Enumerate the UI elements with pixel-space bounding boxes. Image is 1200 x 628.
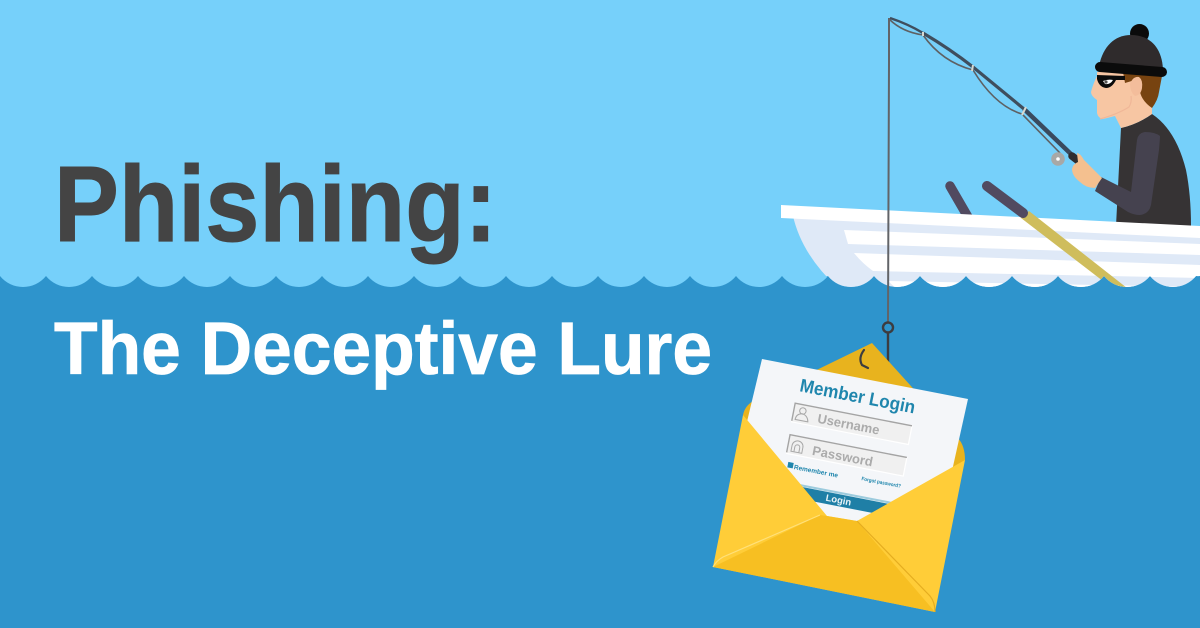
password field <box>786 435 907 476</box>
hair <box>1123 72 1162 108</box>
envelope bottom panel <box>713 515 935 612</box>
rowing boat <box>781 186 1200 292</box>
username icon <box>795 407 810 422</box>
jaw shadow <box>1100 96 1131 119</box>
far oar <box>950 186 972 224</box>
eye <box>1103 80 1113 84</box>
envelope front base <box>713 415 965 612</box>
oar handle <box>987 186 1023 213</box>
reel hub <box>1056 157 1060 161</box>
hand <box>1072 153 1102 188</box>
hook ring <box>883 322 893 332</box>
form heading: Member Login <box>798 374 917 417</box>
rod upper shaft <box>923 33 1024 109</box>
login button label: Login <box>825 493 852 509</box>
username border <box>792 403 912 444</box>
hull <box>793 216 1200 288</box>
mask <box>1097 75 1125 88</box>
remember label: Remember me <box>793 464 839 480</box>
hull stripe 2 <box>854 253 1200 278</box>
password icon <box>791 440 804 453</box>
title: Phishing: Phishing: <box>54 143 497 264</box>
fishing rod <box>889 18 1081 166</box>
forgot password link: Forgot password? <box>861 476 901 490</box>
fisherman <box>1091 24 1191 226</box>
rod tip <box>890 18 923 33</box>
right flap crease <box>857 521 935 612</box>
login form contents <box>767 372 927 519</box>
left flap crease <box>713 515 820 567</box>
fishing line loops <box>889 19 1060 153</box>
hook shank <box>887 333 889 362</box>
login button <box>767 481 906 519</box>
envelope back and flap <box>743 343 965 560</box>
fishing line <box>888 18 889 322</box>
envelope lure <box>713 343 968 612</box>
username placeholder: Username <box>816 411 881 438</box>
reel <box>1051 152 1065 166</box>
hat pompom <box>1130 24 1149 43</box>
hat brim <box>1100 67 1162 72</box>
near oar <box>987 186 1127 288</box>
remember checkbox <box>787 462 794 468</box>
rod guides <box>923 32 1026 115</box>
hat dome <box>1099 35 1163 72</box>
sky with scalloped wave edge <box>0 0 1200 287</box>
hook barb <box>860 350 868 368</box>
hull stripe 3 <box>889 281 1178 287</box>
letter sheet <box>745 359 968 530</box>
password border <box>787 435 907 475</box>
rod grip <box>1072 156 1081 163</box>
neck and face <box>1091 72 1152 128</box>
pupil <box>1104 80 1108 84</box>
subtitle: The Deceptive Lure: The Deceptive Lure <box>54 307 712 390</box>
oar blade <box>1021 211 1127 288</box>
login letter <box>745 359 968 530</box>
rod lower shaft <box>1024 109 1072 155</box>
hull stripe 1 <box>844 230 1200 255</box>
ear <box>1130 77 1142 96</box>
arm <box>1095 132 1160 215</box>
torso <box>1116 114 1191 226</box>
gunwale <box>781 205 1200 238</box>
username field <box>792 403 912 445</box>
login button highlight <box>769 478 907 507</box>
password placeholder: Password <box>811 443 874 469</box>
